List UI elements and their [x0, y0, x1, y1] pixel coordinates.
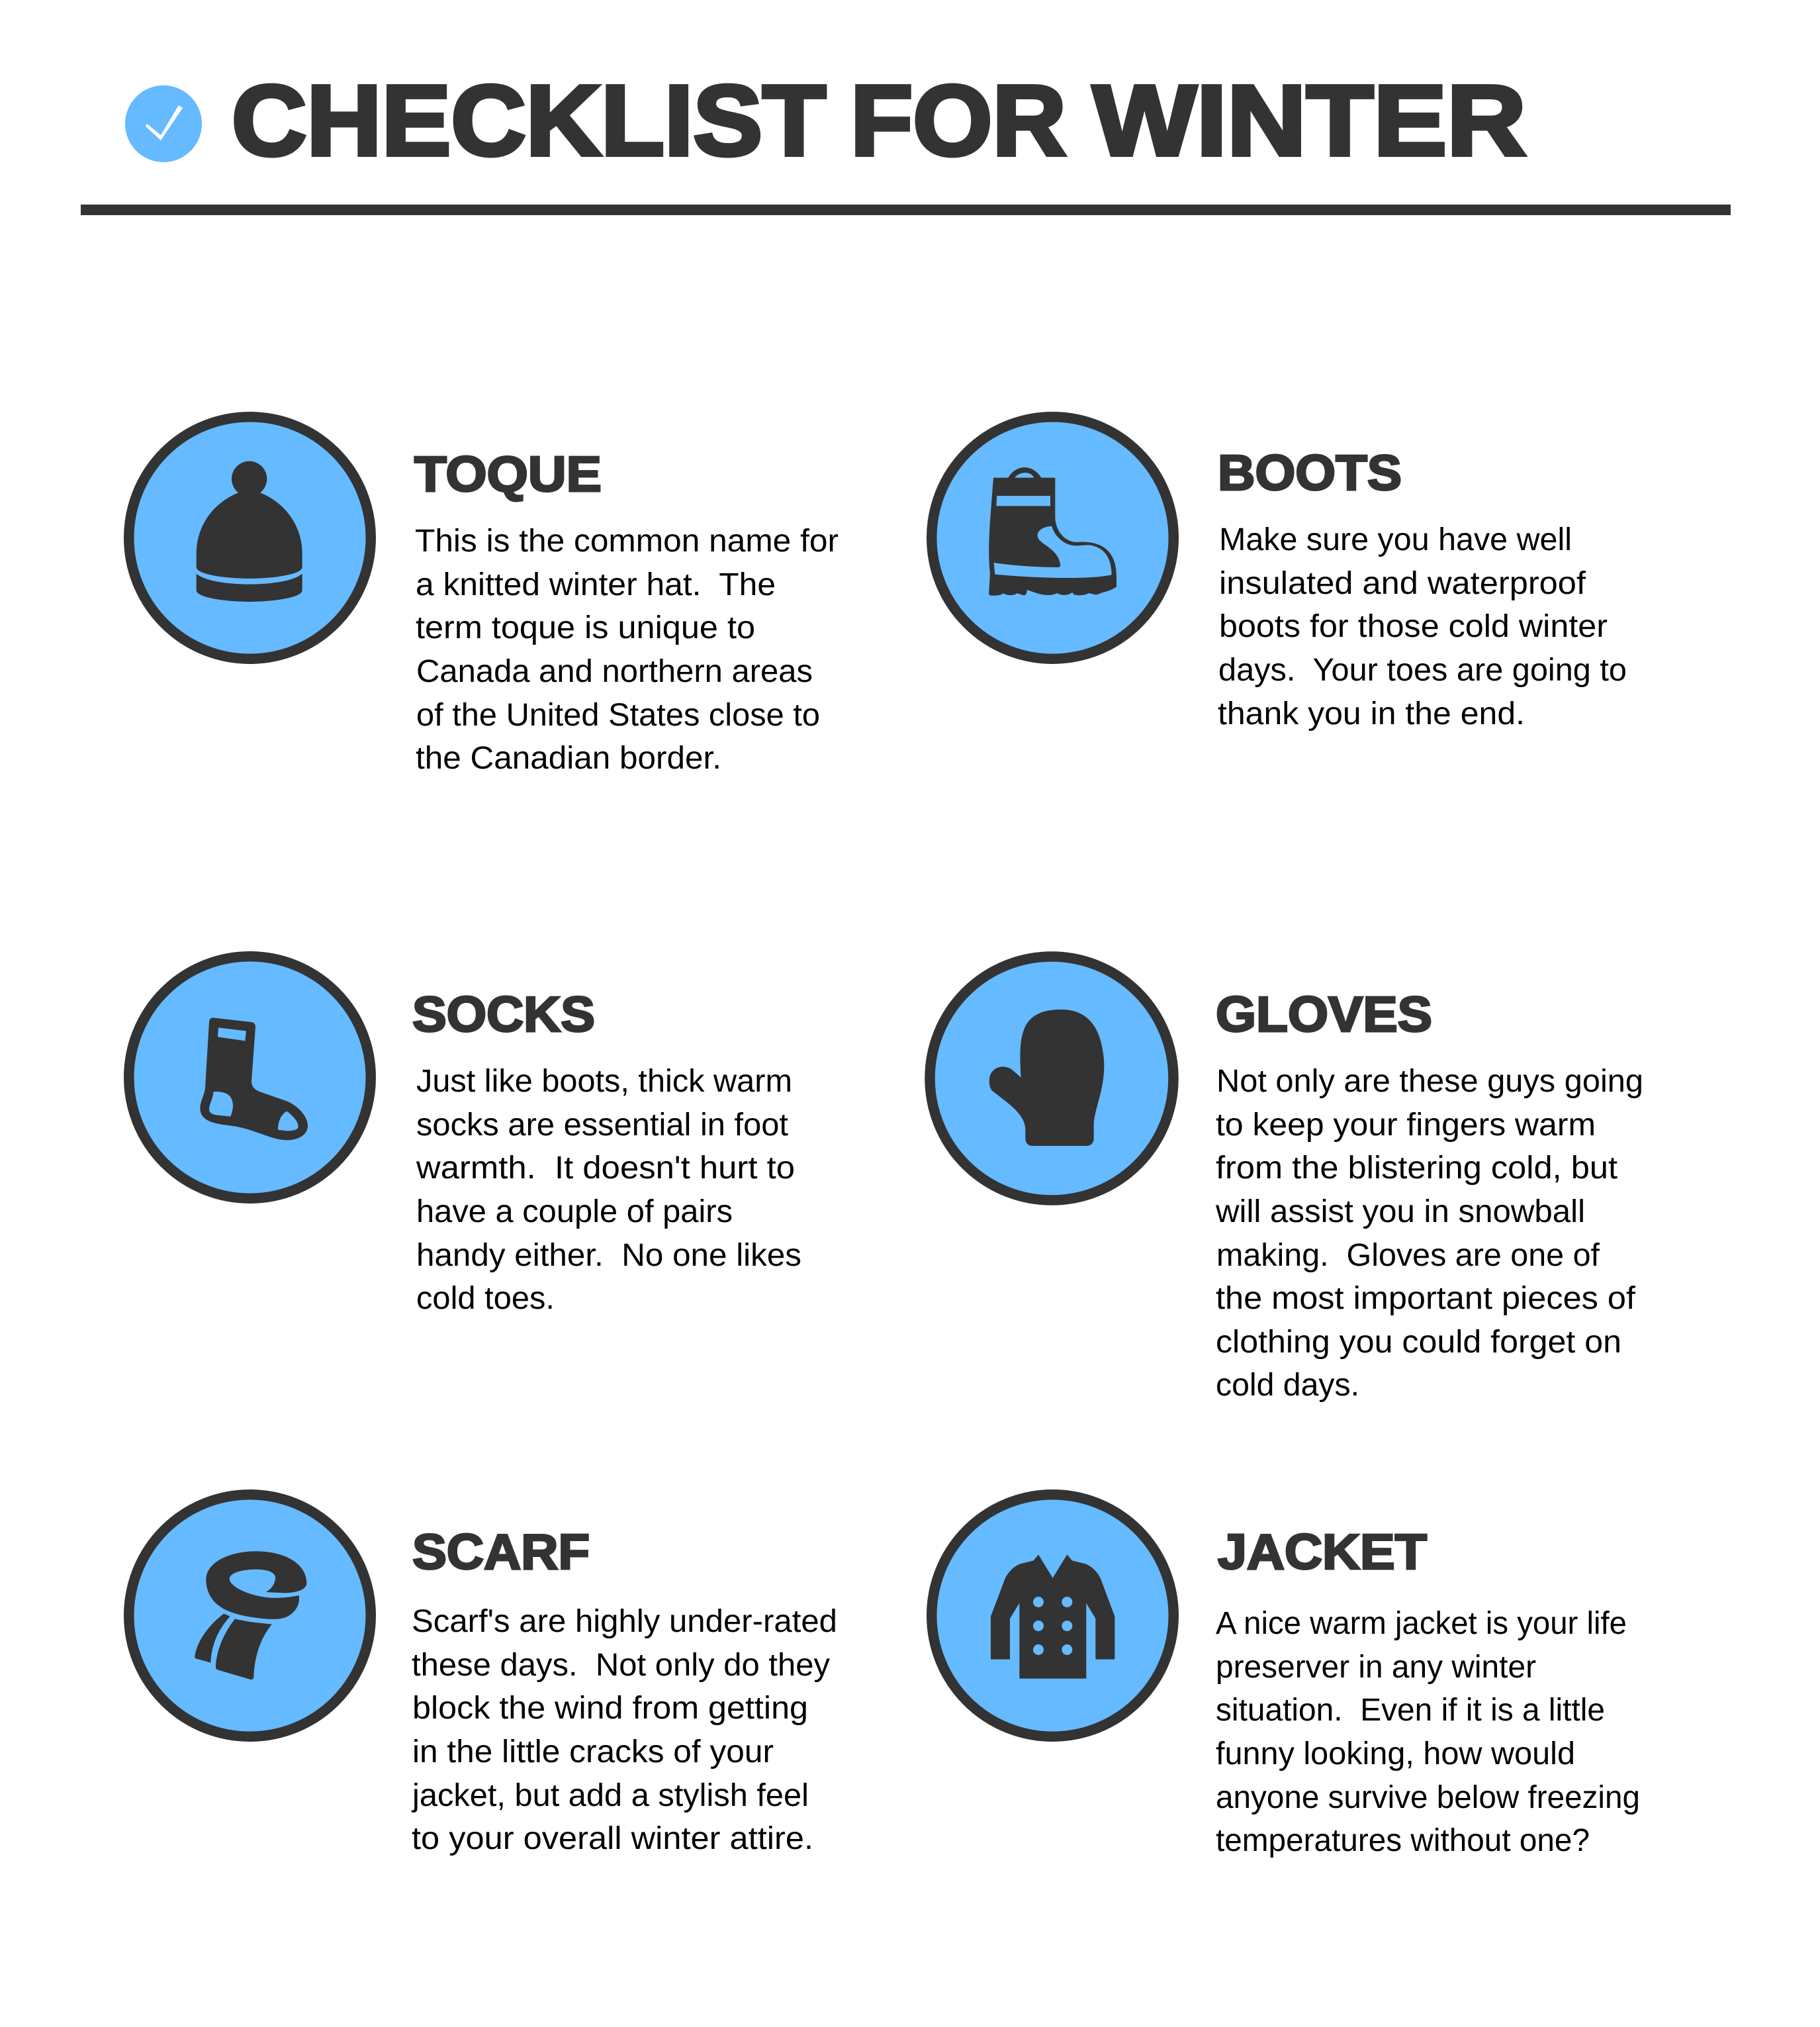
text: toque description: Canada and northern areas — [416, 654, 813, 689]
text: jacket description: temperatures without one? — [1216, 1823, 1590, 1858]
text: socks description: socks are essential in foot — [416, 1108, 788, 1143]
icon: toque — [129, 417, 371, 659]
text: gloves description: Not only are these guys going — [1216, 1064, 1643, 1099]
text: gloves description: cold days. — [1216, 1368, 1359, 1403]
panel: toque — [129, 417, 839, 776]
text: gloves description: making. Gloves are one of — [1216, 1238, 1600, 1273]
text: gloves description: from the blistering cold, but — [1216, 1151, 1617, 1186]
text: jacket description: anyone survive below freezing — [1216, 1780, 1640, 1815]
panel: scarf — [129, 1495, 837, 1856]
text: scarf description: Scarf's are highly under-rated — [412, 1604, 837, 1639]
text: scarf description — [411, 1604, 837, 1856]
title: WINTER — [1093, 64, 1526, 176]
heading: toque: TOQUE — [414, 446, 602, 502]
text: socks description: Just like boots, thick warm — [416, 1064, 792, 1099]
icon: mitten — [930, 957, 1173, 1200]
heading: socks: SOCKS — [412, 986, 595, 1042]
icon: scarf — [129, 1495, 371, 1736]
text: scarf description: to your overall winter attire. — [412, 1821, 813, 1856]
text: gloves description: the most important pieces of — [1216, 1281, 1636, 1316]
title — [232, 64, 1526, 176]
icon: sock — [129, 957, 371, 1198]
text: toque description — [415, 524, 839, 776]
title: CHECKLIST — [232, 64, 826, 176]
text: socks description: cold toes. — [416, 1281, 555, 1316]
text: gloves description: clothing you could forget on — [1216, 1325, 1621, 1360]
text: jacket description: funny looking, how would — [1216, 1736, 1575, 1771]
text: toque description: a knitted winter hat. The — [416, 567, 776, 602]
text: gloves description — [1215, 1064, 1643, 1403]
heading: boots: BOOTS — [1218, 445, 1402, 500]
panel: socks — [129, 957, 801, 1316]
text: jacket description: preserver in any winter — [1216, 1650, 1536, 1685]
panel: boots — [932, 417, 1627, 731]
text: socks description: handy either. No one likes — [416, 1238, 801, 1273]
text: boots description: Make sure you have well — [1219, 522, 1572, 557]
text: gloves description: will assist you in snowball — [1215, 1194, 1585, 1229]
title rule — [81, 205, 1731, 215]
icon: title check badge — [125, 85, 202, 162]
text: jacket description — [1216, 1606, 1640, 1858]
text: scarf description: these days. Not only do they — [412, 1648, 830, 1683]
icon: jacket — [932, 1495, 1173, 1736]
text: socks description: warmth. It doesn't hurt to — [416, 1151, 795, 1186]
text: jacket description: situation. Even if it is a little — [1216, 1693, 1605, 1728]
text: toque description: the Canadian border. — [416, 741, 721, 776]
text: jacket description: A nice warm jacket is your life — [1216, 1606, 1627, 1641]
panel: gloves — [930, 957, 1643, 1403]
heading: gloves: GLOVES — [1216, 986, 1432, 1042]
text: boots description: insulated and waterproof — [1219, 566, 1586, 601]
text: boots description: boots for those cold winter — [1219, 609, 1608, 644]
icon: boot — [932, 417, 1173, 659]
text: scarf description: block the wind from getting — [412, 1691, 808, 1726]
text: boots description: days. Your toes are going to — [1218, 653, 1627, 688]
panel: jacket — [932, 1495, 1640, 1858]
text: boots description: thank you in the end. — [1218, 696, 1525, 731]
heading: scarf: SCARF — [412, 1524, 590, 1579]
title: FOR — [850, 64, 1066, 176]
text: toque description: term toque is unique to — [416, 610, 755, 645]
header — [81, 64, 1731, 215]
text: boots description — [1218, 522, 1627, 731]
text: toque description: of the United States close to — [416, 698, 820, 733]
text: scarf description: jacket, but add a stylish feel — [411, 1778, 809, 1813]
text: gloves description: to keep your fingers warm — [1216, 1108, 1596, 1143]
heading: jacket: JACKET — [1218, 1524, 1427, 1579]
text: socks description: have a couple of pairs — [416, 1194, 733, 1229]
text: toque description: This is the common name for — [415, 524, 839, 559]
text: scarf description: in the little cracks of your — [412, 1734, 774, 1769]
text: socks description — [416, 1064, 801, 1316]
